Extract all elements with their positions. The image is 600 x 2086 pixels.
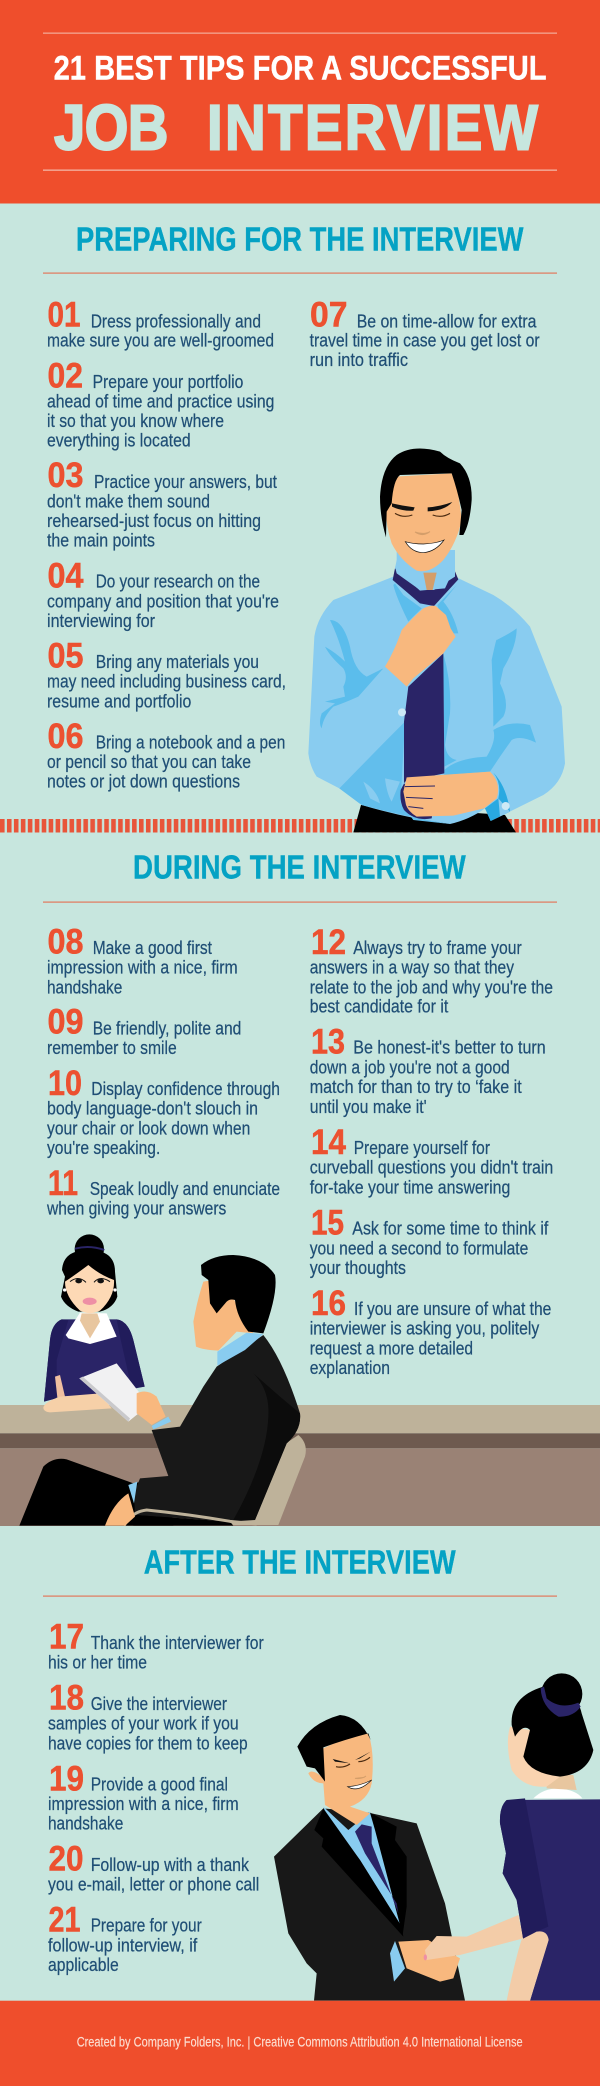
tip 19: 19 [49,1759,84,1798]
heading: preparing: PREPARING FOR THE INTERVIEW [76,221,524,258]
tip 12: answers in a way so that they [310,957,515,978]
tip 01: make sure you are well-groomed [47,330,274,351]
tip 19: Provide a good final [91,1773,228,1794]
tip 21: Prepare for your [91,1915,202,1936]
tip 04: 04 [48,556,84,595]
tip 17 [48,1618,264,1673]
tip 11 [46,1164,280,1219]
tip 07 [310,296,540,370]
tip 08: Make a good first [93,937,212,958]
tip 11: Speak loudly and enunciate [90,1178,280,1199]
title line two: INTERVIEW [207,91,538,163]
tip 10: your chair or look down when [47,1117,250,1138]
tip 17: 17 [49,1618,84,1657]
tip 01: Dress professionally and [91,310,261,331]
tip 20: 20 [48,1840,84,1879]
tip 02 [47,357,274,451]
tip 20: Follow-up with a thank [91,1854,250,1875]
tip 06: or pencil so that you can take [47,751,251,772]
tip 16: 16 [311,1284,346,1323]
heading: after: AFTER THE INTERVIEW [144,1543,456,1580]
illustration: handshake [274,1673,600,2001]
tip 05: may need including business card, [47,671,286,692]
tip 10: 10 [48,1064,82,1103]
tip 03: don't make them sound [47,490,210,511]
tip 14: curveball questions you didn't train [310,1157,553,1178]
tip 15: your thoughts [310,1257,406,1278]
tip 07: run into traffic [310,349,408,370]
panel: preparing for the interview [43,221,557,792]
tip 18: Give the interviewer [91,1693,227,1714]
tip 20: you e-mail, letter or phone call [48,1874,259,1895]
tip 18: have copies for them to keep [48,1732,248,1753]
tip 04: company and position that you're [47,591,279,612]
tip 12: Always try to frame your [353,937,522,958]
tip 03: 03 [48,456,84,495]
title line two: JOB [54,91,168,163]
tip 06: notes or jot down questions [47,771,240,792]
footer banner [0,2001,600,2086]
tip 02: everything is located [47,430,191,451]
tip 05: 05 [48,637,84,676]
tip 08: handshake [47,976,122,997]
tip 03 [47,456,277,551]
tip 08 [47,922,238,997]
tip 14 [310,1123,553,1197]
tip 12: best candidate for it [310,996,448,1017]
tip 06: Bring a notebook and a pen [96,732,285,753]
tip 10 [47,1064,280,1158]
tip 13 [310,1022,546,1117]
striped divider [0,819,600,832]
tip 02: Prepare your portfolio [93,371,243,392]
tip 14: for-take your time answering [310,1176,510,1197]
tip 06 [47,717,285,792]
tip 16: interviewer is asking you, politely [310,1318,540,1339]
tip 03: Practice your answers, but [94,471,277,492]
tip 17: his or her time [48,1652,147,1673]
tip 13: match for than to try to ‘fake it [310,1076,522,1097]
tip 08: 08 [48,922,84,961]
tip 16: explanation [310,1357,390,1378]
tip 12 [310,923,553,1017]
panel: during the interview [43,849,557,1378]
tip 09: Be friendly, polite and [93,1017,241,1038]
tip 15: 15 [311,1203,344,1242]
tip 03: the main points [47,530,155,551]
tip 15: Ask for some time to think if [352,1218,549,1239]
tip 09 [47,1003,241,1058]
tip 04: Do your research on the [96,571,260,592]
tip 14: 14 [311,1123,346,1162]
tip 01 [47,296,274,351]
tip 13: 13 [311,1022,345,1061]
tip 16: If you are unsure of what the [354,1298,551,1319]
tip 10: body language-don't slouch in [47,1098,258,1119]
tip 18: samples of your work if you [48,1713,239,1734]
tip 07: 07 [310,296,348,335]
tip 11: 11 [48,1164,78,1203]
tip 21 [48,1900,202,1975]
tip 16: request a more detailed [310,1337,473,1358]
tip 05: resume and portfolio [47,690,191,711]
tip 16 [310,1284,551,1378]
tip 18 [48,1679,248,1753]
tip 15: you need a second to formulate [310,1237,528,1258]
tip 13: Be honest-it's better to turn [353,1037,546,1058]
tip 20 [48,1840,259,1895]
tip 19: impression with a nice, firm [48,1793,239,1814]
heading: during: DURING THE INTERVIEW [133,849,466,886]
tip 14: Prepare yourself for [354,1137,490,1158]
tip 07: travel time in case you get lost or [310,330,540,351]
illustration: interview at desk [0,1234,600,1526]
tip 21: follow-up interview, if [48,1934,198,1955]
tip 02: 02 [48,357,83,396]
tip 01: 01 [48,296,80,335]
tip 12: 12 [311,923,346,962]
title line two [54,91,538,163]
tip 19 [48,1759,239,1834]
tip 13: down a job you're not a good [310,1056,510,1077]
tip 19: handshake [48,1813,123,1834]
tip 12: relate to the job and why you're the [310,976,553,997]
tip 08: impression with a nice, firm [47,957,238,978]
header banner [0,0,600,204]
tip 10: you're speaking. [47,1137,160,1158]
tip 21: 21 [48,1900,80,1939]
tip 09: remember to smile [47,1037,177,1058]
tip 02: ahead of time and practice using [47,391,274,412]
tip 21: applicable [48,1954,119,1975]
tip 17: Thank the interviewer for [91,1632,264,1653]
tip 05: Bring any materials you [96,651,259,672]
tip 11: when giving your answers [46,1198,226,1219]
tip 13: until you make it' [310,1096,427,1117]
tip 10: Display confidence through [91,1078,280,1099]
tip 04 [47,556,279,631]
panel: after the interview [43,1543,557,1975]
tip 15 [310,1203,549,1278]
tip 07: Be on time-allow for extra [357,310,537,331]
tip 05 [47,637,286,711]
tip 03: rehearsed-just focus on hitting [47,510,261,531]
tip 09: 09 [48,1003,84,1042]
illustration: man adjusting tie [308,449,565,832]
tip 04: interviewing for [47,610,155,631]
tip 02: it so that you know where [47,410,224,431]
tip 18: 18 [49,1679,84,1718]
tip 06: 06 [48,717,84,756]
